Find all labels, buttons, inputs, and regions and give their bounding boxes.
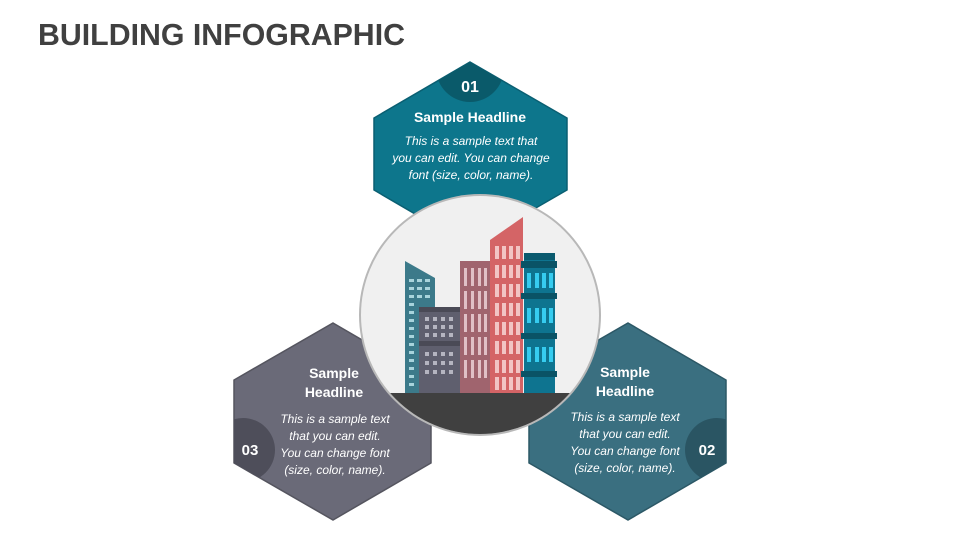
number badge 01: 01 — [461, 79, 479, 96]
ground — [390, 393, 570, 434]
number badge 03: 03 — [242, 442, 258, 459]
building: gray — [419, 307, 460, 393]
title: BUILDING INFOGRAPHIC — [38, 17, 405, 52]
number badge 01 — [438, 62, 502, 102]
body 01: This is a sample text that — [405, 134, 538, 148]
building: mauve — [460, 261, 490, 393]
number badge 03 — [234, 418, 275, 477]
central circle with buildings — [359, 194, 601, 436]
panel: 02 — [529, 323, 749, 520]
body 01: font (size, color, name). — [409, 168, 533, 182]
headline 03: Sample — [309, 365, 359, 381]
panel: 01 — [373, 61, 568, 214]
number badge 02: 02 — [699, 442, 715, 459]
building: blue — [521, 253, 557, 393]
body 03: You can change font — [280, 446, 390, 460]
body 02: that you can edit. — [579, 427, 671, 441]
number badge 02 — [685, 418, 726, 477]
building: teal slanted — [405, 261, 435, 393]
body 01: you can edit. You can change — [391, 151, 550, 165]
body 02: This is a sample text — [570, 410, 680, 424]
headline 03: Headline — [305, 384, 363, 400]
body 02: (size, color, name). — [574, 461, 676, 475]
panel: 03 — [211, 323, 431, 520]
building: red slanted — [490, 217, 523, 393]
headline 02: Headline — [596, 383, 654, 399]
headline 01: Sample Headline — [414, 109, 526, 125]
body 03: that you can edit. — [289, 429, 381, 443]
body 02: You can change font — [570, 444, 680, 458]
headline 02: Sample — [600, 364, 650, 380]
body 03: (size, color, name). — [284, 463, 386, 477]
body 03: This is a sample text — [280, 412, 390, 426]
